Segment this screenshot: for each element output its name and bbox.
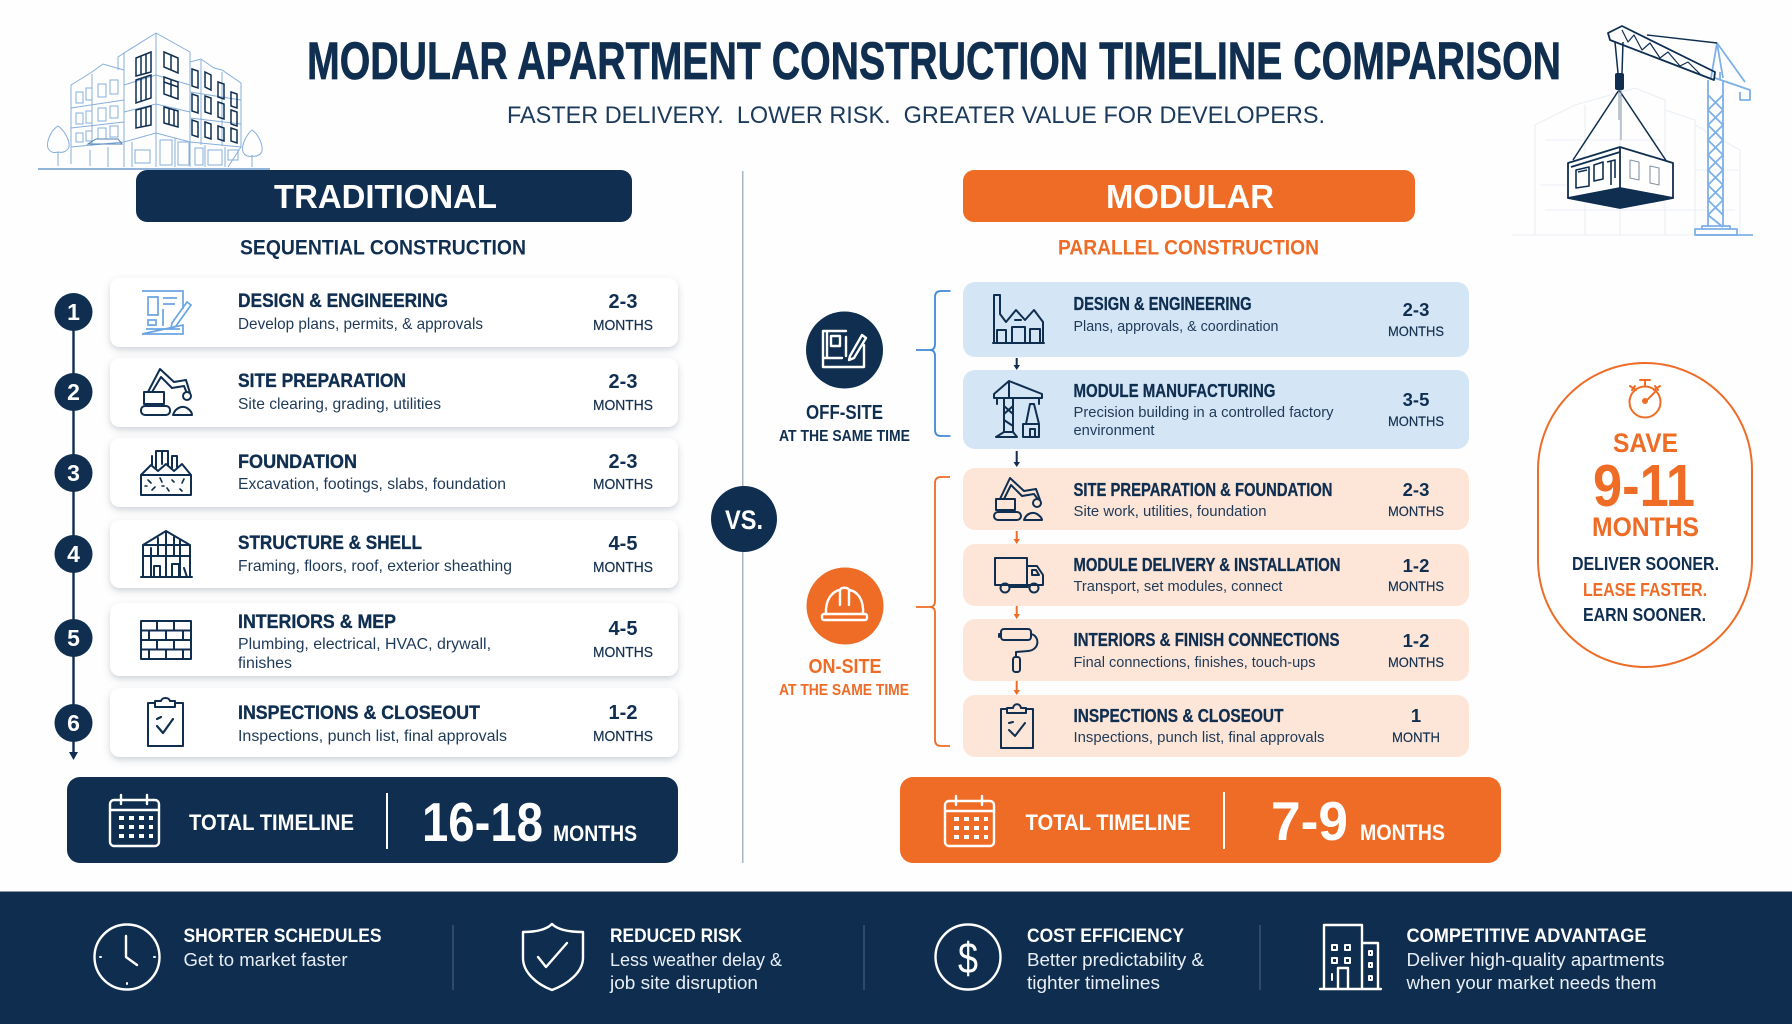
benefit: competitive advantage bbox=[1320, 925, 1664, 993]
modular step: module manufacturing: MODULE MANUFACTURING bbox=[1074, 381, 1276, 401]
modular step: module delivery and installation: Transport, set modules, connect bbox=[1074, 578, 1283, 595]
subheading: parallel construction: PARALLEL CONSTRUCTION bbox=[1058, 236, 1319, 260]
modular step: module delivery and installation bbox=[963, 544, 1469, 606]
hook bbox=[1615, 73, 1624, 90]
step 1 bbox=[54, 278, 678, 347]
jib bbox=[1573, 26, 1717, 162]
modular step: site preparation and foundation bbox=[963, 468, 1469, 530]
panel: traditional bbox=[54, 170, 678, 863]
subtitle: FASTER DELIVERY. LOWER RISK. GREATER VALUE FOR DEVELOPERS. bbox=[507, 102, 1325, 129]
modular step: inspections and closeout: Inspections, punch list, final approvals bbox=[1074, 729, 1324, 746]
footer band bbox=[0, 891, 1792, 1024]
on-site group: AT THE SAME TIME bbox=[779, 682, 909, 699]
benefit: cost efficiency bbox=[936, 924, 1204, 993]
mast bbox=[1695, 43, 1753, 235]
icon: paint roller bbox=[999, 629, 1037, 672]
benefit: competitive advantage: Deliver high-quality apartments bbox=[1406, 950, 1664, 970]
subheading: sequential construction: SEQUENTIAL CONSTRUCTION bbox=[240, 236, 526, 260]
illustration: apartment building line drawing bbox=[38, 33, 270, 169]
step 4: 4 bbox=[67, 541, 80, 567]
modular step: interiors and finish connections: Final connections, finishes, touch-ups bbox=[1074, 654, 1316, 671]
modular step: module delivery and installation: MODULE DELIVERY & INSTALLATION bbox=[1074, 555, 1340, 575]
callout: save 9-11 months: DELIVER SOONER. bbox=[1572, 553, 1719, 574]
icon: dollar bbox=[936, 924, 1000, 990]
total timeline: modular bbox=[900, 777, 1501, 863]
modular step: site preparation and foundation: SITE PREPARATION & FOUNDATION bbox=[1074, 480, 1332, 500]
step 2: MONTHS bbox=[593, 397, 653, 414]
modular step: inspections and closeout: INSPECTIONS & CLOSEOUT bbox=[1074, 706, 1284, 726]
on-site group: ON-SITE bbox=[808, 656, 882, 678]
icon: factory bbox=[993, 295, 1044, 343]
modular step: design and engineering bbox=[963, 282, 1469, 357]
module bbox=[1568, 147, 1673, 208]
benefit: shorter schedules bbox=[94, 924, 382, 990]
callout: save 9-11 months bbox=[1538, 363, 1752, 667]
heading: modular bbox=[963, 170, 1415, 222]
modular step: site preparation and foundation: Site work, utilities, foundation bbox=[1074, 503, 1266, 520]
icon: blueprint and pencil bbox=[142, 291, 191, 334]
callout: save 9-11 months: MONTHS bbox=[1592, 512, 1699, 542]
step 3: MONTHS bbox=[593, 476, 653, 493]
step 4: Framing, floors, roof, exterior sheathing bbox=[238, 558, 512, 575]
step 6: INSPECTIONS & CLOSEOUT bbox=[238, 702, 480, 724]
step 6: 1-2 bbox=[609, 702, 637, 724]
callout: save 9-11 months: SAVE bbox=[1613, 428, 1678, 458]
illustration: crane lifting module bbox=[1512, 26, 1753, 235]
callout: save 9-11 months: LEASE FASTER. bbox=[1583, 579, 1707, 600]
icon: buildings bbox=[1320, 925, 1381, 989]
icon: dollar: $ bbox=[958, 934, 978, 983]
benefit: cost efficiency: COST EFFICIENCY bbox=[1027, 926, 1184, 947]
icon: clipboard bbox=[1001, 704, 1033, 748]
modular step: design and engineering: MONTHS bbox=[1388, 323, 1444, 339]
step 1: 1 bbox=[67, 299, 80, 325]
benefit: reduced risk: Less weather delay & bbox=[610, 950, 782, 970]
step 3 bbox=[54, 438, 678, 507]
benefit: shorter schedules: Get to market faster bbox=[184, 950, 348, 970]
bracket bbox=[916, 291, 950, 436]
step 3: FOUNDATION bbox=[238, 451, 357, 473]
icon: excavator bbox=[141, 369, 192, 415]
benefit: cost efficiency: tighter timelines bbox=[1027, 973, 1160, 993]
step 3: Excavation, footings, slabs, foundation bbox=[238, 476, 506, 493]
step 6: 6 bbox=[67, 710, 80, 736]
step 5: finishes bbox=[238, 655, 292, 672]
timeline line with arrow bbox=[72, 312, 75, 754]
step 3: 3 bbox=[67, 460, 80, 486]
total timeline: modular: MONTHS bbox=[1360, 820, 1445, 845]
step 4: STRUCTURE & SHELL bbox=[238, 532, 422, 554]
step 1: MONTHS bbox=[593, 317, 653, 334]
modular step: module manufacturing: environment bbox=[1074, 422, 1155, 439]
icon: calendar bbox=[110, 795, 159, 846]
icon: stopwatch bbox=[1630, 380, 1660, 418]
step 5: INTERIORS & MEP bbox=[238, 611, 396, 633]
total timeline: modular: TOTAL TIMELINE bbox=[1026, 810, 1190, 835]
callout: save 9-11 months: 9-11 bbox=[1593, 453, 1695, 519]
step 2: 2 bbox=[67, 379, 80, 405]
benefit: reduced risk: REDUCED RISK bbox=[610, 926, 742, 947]
panel: modular bbox=[779, 170, 1501, 863]
step 1: DESIGN & ENGINEERING bbox=[238, 290, 448, 312]
icon: clock bbox=[94, 924, 160, 990]
icon: bricks bbox=[141, 621, 191, 659]
modular step: design and engineering: 2-3 bbox=[1403, 299, 1429, 320]
step 6 bbox=[54, 688, 678, 757]
icon: house frame bbox=[141, 531, 192, 577]
step 3: 2-3 bbox=[609, 451, 637, 473]
icon: calendar bbox=[945, 796, 994, 846]
modular step: module manufacturing bbox=[963, 370, 1469, 449]
step 4: 4-5 bbox=[609, 533, 637, 555]
modular step: site preparation and foundation: 2-3 bbox=[1403, 479, 1429, 500]
divider with VS badge bbox=[711, 171, 777, 863]
benefit: cost efficiency: Better predictability & bbox=[1027, 950, 1204, 970]
step 2: SITE PREPARATION bbox=[238, 370, 406, 392]
ghost building bbox=[1512, 88, 1753, 235]
step 2 bbox=[54, 358, 678, 427]
arrows between modular steps bbox=[1014, 358, 1020, 695]
off-site group bbox=[779, 291, 950, 445]
icon: hard hat bbox=[822, 588, 867, 620]
modular step: site preparation and foundation: MONTHS bbox=[1388, 503, 1444, 519]
icon: tower crane and module bbox=[994, 381, 1042, 437]
callout: save 9-11 months: EARN SOONER. bbox=[1583, 604, 1706, 625]
divider with VS badge: VS. bbox=[725, 505, 763, 535]
modular step: inspections and closeout bbox=[963, 695, 1469, 757]
timeline arrow head bbox=[69, 752, 78, 760]
modular step: interiors and finish connections: MONTHS bbox=[1388, 654, 1444, 670]
modular step: inspections and closeout: MONTH bbox=[1392, 729, 1440, 745]
benefit: shorter schedules: SHORTER SCHEDULES bbox=[184, 926, 382, 947]
step 5: 5 bbox=[67, 625, 80, 651]
step 1: 2-3 bbox=[609, 291, 637, 313]
icon: blueprint bbox=[823, 331, 866, 367]
benefit: competitive advantage: COMPETITIVE ADVANTAGE bbox=[1406, 926, 1646, 947]
step 1: Develop plans, permits, & approvals bbox=[238, 316, 483, 333]
step 5: 4-5 bbox=[609, 618, 637, 640]
total timeline: traditional: TOTAL TIMELINE bbox=[189, 810, 354, 835]
heading: traditional: TRADITIONAL bbox=[274, 178, 497, 215]
off-site group: OFF-SITE bbox=[806, 402, 883, 424]
benefit: competitive advantage: when your market needs them bbox=[1405, 973, 1656, 993]
modular step: design and engineering: Plans, approvals, & coordination bbox=[1074, 318, 1278, 335]
total timeline: traditional: MONTHS bbox=[553, 821, 637, 846]
total timeline: traditional: 16-18 bbox=[422, 791, 543, 853]
step 5: Plumbing, electrical, HVAC, drywall, bbox=[238, 636, 491, 653]
icon: shield and check bbox=[523, 924, 583, 990]
modular step: interiors and finish connections: INTERIORS & FINISH CONNECTIONS bbox=[1074, 630, 1340, 650]
icon: foundation bbox=[141, 451, 191, 495]
total timeline: modular: 7-9 bbox=[1271, 790, 1348, 852]
step 6: MONTHS bbox=[593, 728, 653, 745]
step 6: Inspections, punch list, final approvals bbox=[238, 728, 507, 745]
off-site group: AT THE SAME TIME bbox=[779, 428, 910, 445]
modular step: module manufacturing: 3-5 bbox=[1403, 389, 1429, 410]
modular step: interiors and finish connections bbox=[963, 619, 1469, 681]
modular step: module manufacturing: MONTHS bbox=[1388, 413, 1444, 429]
on-site group bbox=[779, 477, 950, 746]
modular step: module delivery and installation: MONTHS bbox=[1388, 578, 1444, 594]
bracket bbox=[916, 477, 950, 746]
step 4 bbox=[54, 520, 678, 588]
step 2: Site clearing, grading, utilities bbox=[238, 396, 441, 413]
modular step: module manufacturing: Precision building in a controlled factory bbox=[1074, 404, 1334, 421]
icon: clipboard bbox=[148, 698, 183, 746]
modular step: inspections and closeout: 1 bbox=[1411, 705, 1421, 726]
benefit: reduced risk: job site disruption bbox=[609, 973, 758, 993]
heading: traditional bbox=[136, 170, 632, 222]
benefit: reduced risk bbox=[523, 924, 782, 993]
total timeline: traditional bbox=[67, 777, 678, 863]
heading: modular: MODULAR bbox=[1106, 178, 1274, 215]
modular step: interiors and finish connections: 1-2 bbox=[1403, 630, 1429, 651]
icon: truck bbox=[995, 558, 1043, 592]
icon: excavator bbox=[994, 478, 1042, 520]
step 4: MONTHS bbox=[593, 559, 653, 576]
step 2: 2-3 bbox=[609, 371, 637, 393]
step 5 bbox=[54, 603, 678, 676]
modular step: module delivery and installation: 1-2 bbox=[1403, 555, 1429, 576]
step 5: MONTHS bbox=[593, 644, 653, 661]
modular step: design and engineering: DESIGN & ENGINEERING bbox=[1074, 294, 1252, 314]
